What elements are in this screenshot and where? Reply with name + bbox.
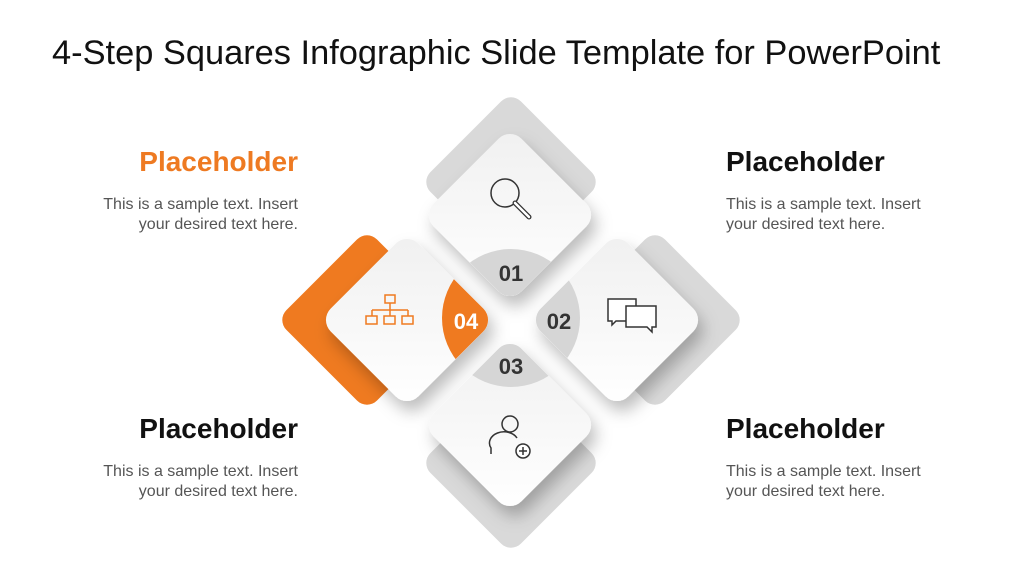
heading: bottom-right: Placeholder [726, 413, 885, 444]
heading: top-left: Placeholder [139, 146, 298, 177]
heading: top-right: Placeholder [726, 146, 885, 177]
center circle wedges [442, 249, 580, 387]
numbers: 03 [499, 354, 523, 379]
back squares [276, 91, 746, 554]
text: top-left: your desired text here. [139, 216, 298, 233]
icon: add user [489, 416, 530, 458]
numbers [454, 261, 571, 379]
text: top-left: This is a sample text. Insert [103, 196, 298, 213]
text: top-left [103, 196, 298, 233]
numbers: 04 [454, 309, 479, 334]
white squares [319, 127, 705, 513]
text: top-right [726, 196, 921, 233]
heading: bottom-left: Placeholder [139, 413, 298, 444]
numbers: 01 [499, 261, 523, 286]
icon: chat [608, 299, 656, 332]
diagram [282, 97, 740, 548]
numbers: 02 [547, 309, 571, 334]
text: bottom-right: This is a sample text. Insert [726, 463, 921, 480]
text: bottom-right: your desired text here. [726, 483, 885, 500]
text: bottom-left: your desired text here. [139, 483, 298, 500]
icon: magnifier [491, 179, 529, 217]
title: 4-Step Squares Infographic Slide Template for PowerPoint [52, 34, 940, 72]
text: bottom-left: This is a sample text. Insert [103, 463, 298, 480]
icon: org chart [366, 295, 413, 324]
text: bottom-right [726, 463, 921, 500]
text: top-right: This is a sample text. Insert [726, 196, 921, 213]
text: bottom-left [103, 463, 298, 500]
text: top-right: your desired text here. [726, 216, 885, 233]
